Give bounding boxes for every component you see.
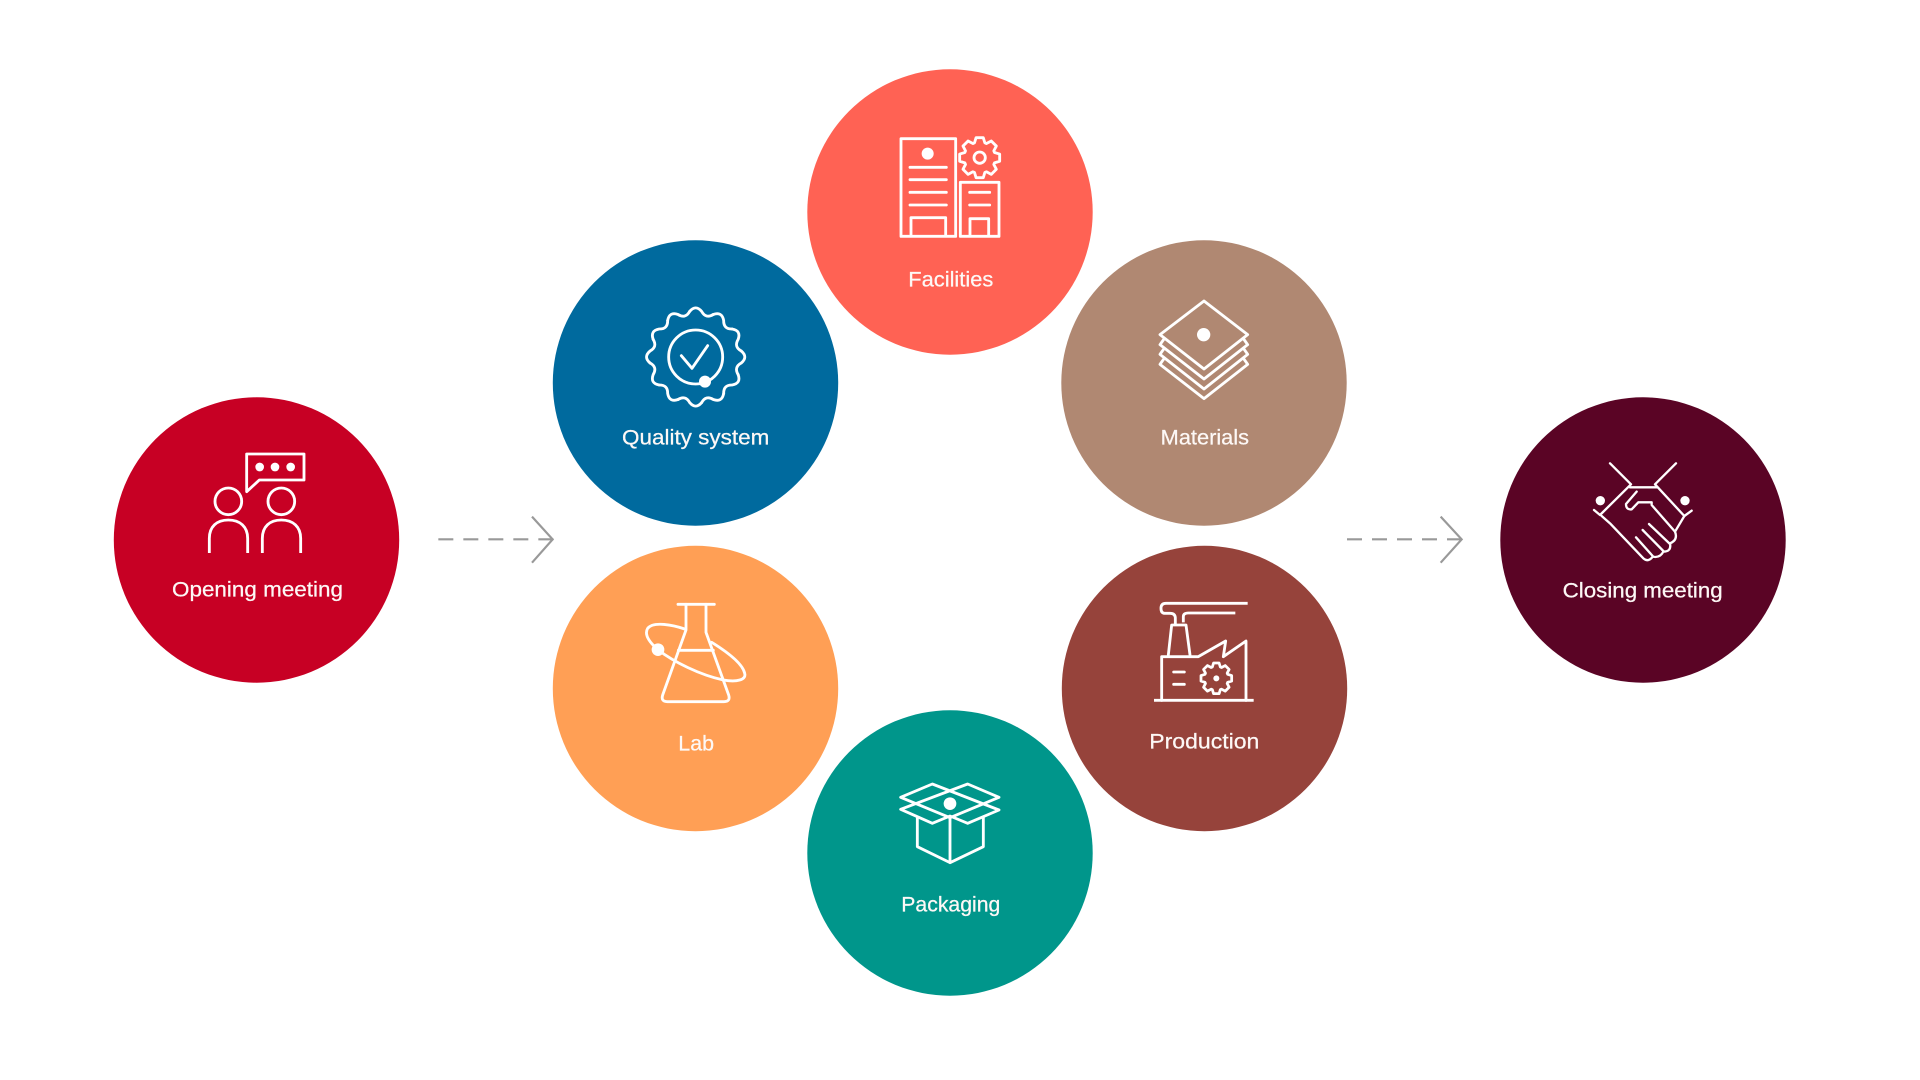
panel: facilities	[807, 69, 1093, 355]
panel: lab	[553, 546, 838, 831]
label: opening meeting: Opening meeting	[172, 578, 343, 602]
label: materials: Materials	[1161, 425, 1249, 449]
label: packaging: Packaging	[901, 893, 1000, 917]
icon: stacked sheets	[1160, 301, 1248, 399]
label: closing meeting: Closing meeting	[1563, 578, 1723, 602]
icon: quality seal with check mark	[644, 306, 747, 408]
icon: open box	[901, 784, 999, 863]
panel: quality system	[553, 240, 838, 526]
arrow: opening to audit areas	[438, 517, 553, 563]
label: facilities: Facilities	[908, 268, 993, 292]
icon: handshake	[1594, 463, 1692, 560]
icon: buildings with gear	[901, 138, 1000, 236]
icon: factory with gear	[1154, 603, 1254, 700]
panel: production	[1062, 546, 1347, 831]
panel: opening meeting	[114, 397, 399, 683]
label: quality system: Quality system	[622, 425, 769, 449]
arrow: audit areas to closing	[1347, 517, 1462, 563]
label: lab: Lab	[678, 732, 714, 756]
icon: flask with orbit	[646, 604, 745, 702]
panel: closing meeting	[1500, 397, 1786, 683]
panel: materials	[1061, 240, 1347, 526]
panel: packaging	[807, 710, 1093, 996]
icon: two people with speech bubble	[209, 454, 304, 553]
label: production: Production	[1149, 729, 1259, 753]
